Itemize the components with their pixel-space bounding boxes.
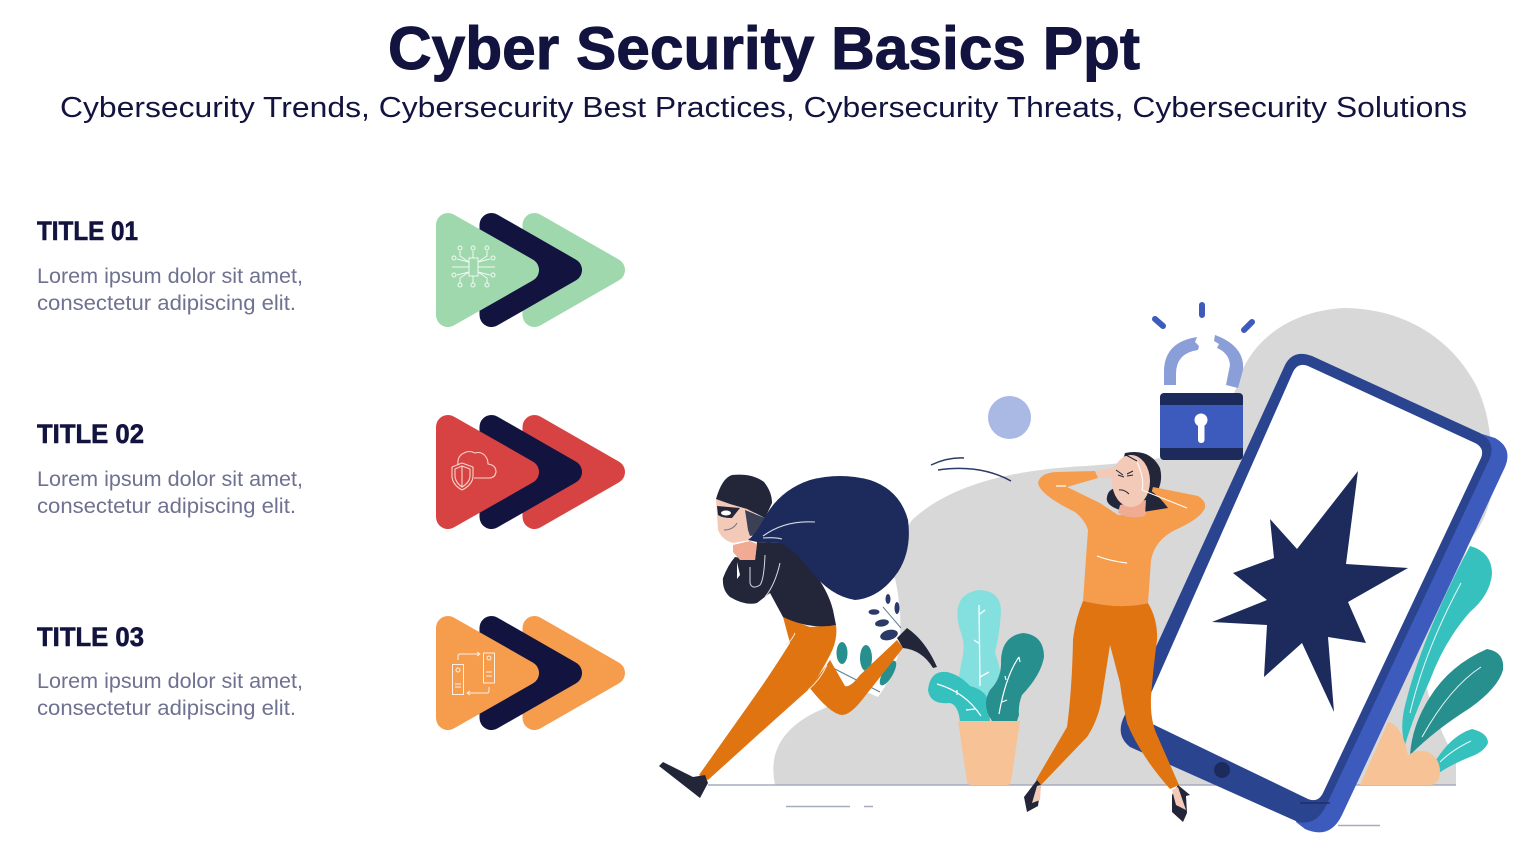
text block: title 01 [37, 216, 303, 315]
cracked screen star [1212, 471, 1408, 712]
icon: circuit chip [452, 246, 495, 287]
text block: title 02: TITLE 02 [37, 419, 144, 449]
motion lines [931, 458, 1011, 481]
title: Cyber Security Basics Ppt [388, 15, 1140, 82]
potted plant [928, 590, 1044, 785]
text block: title 02: Lorem ipsum dolor sit amet, [37, 468, 303, 491]
circle [988, 396, 1031, 439]
text block: title 01: consectetur adipiscing elit. [37, 292, 296, 315]
text block: title 01: Lorem ipsum dolor sit amet, [37, 265, 303, 288]
icon: servers exchange [452, 652, 494, 695]
thief [659, 475, 937, 798]
text block: title 03 [37, 622, 303, 720]
ground dashes [786, 806, 1380, 826]
money bag [748, 476, 909, 600]
subtitle: Cybersecurity Trends, Cybersecurity Best Practices, Cybersecurity Threats, Cybersecurity Solutions [60, 92, 1467, 124]
text block: title 03: Lorem ipsum dolor sit amet, [37, 670, 303, 693]
white leaf behind thief [830, 578, 900, 697]
thief head [716, 499, 755, 543]
leaf details [833, 594, 901, 692]
text block: title 02: consectetur adipiscing elit. [37, 495, 296, 518]
right plant [1360, 546, 1503, 785]
home button [1214, 762, 1230, 778]
text block: title 03: consectetur adipiscing elit. [37, 697, 296, 720]
illustration: cyber theft scene [659, 305, 1507, 832]
icon: shield and cloud [452, 452, 496, 490]
woman shoes [1024, 780, 1190, 822]
arrows: green triple triangle with circuit icon [448, 225, 613, 315]
text block: title 01: TITLE 01 [37, 216, 138, 246]
broken padlock [1155, 305, 1252, 460]
woman [1024, 452, 1205, 822]
ground line [708, 784, 1456, 786]
thief shoes [659, 762, 708, 798]
arrows: red triple triangle with shield cloud icon [448, 427, 613, 517]
text block: title 02 [37, 419, 303, 518]
phone [1121, 354, 1507, 832]
background blob [773, 308, 1492, 785]
text block: title 03: TITLE 03 [37, 622, 144, 652]
arrows: orange triple triangle with servers icon [448, 628, 613, 718]
